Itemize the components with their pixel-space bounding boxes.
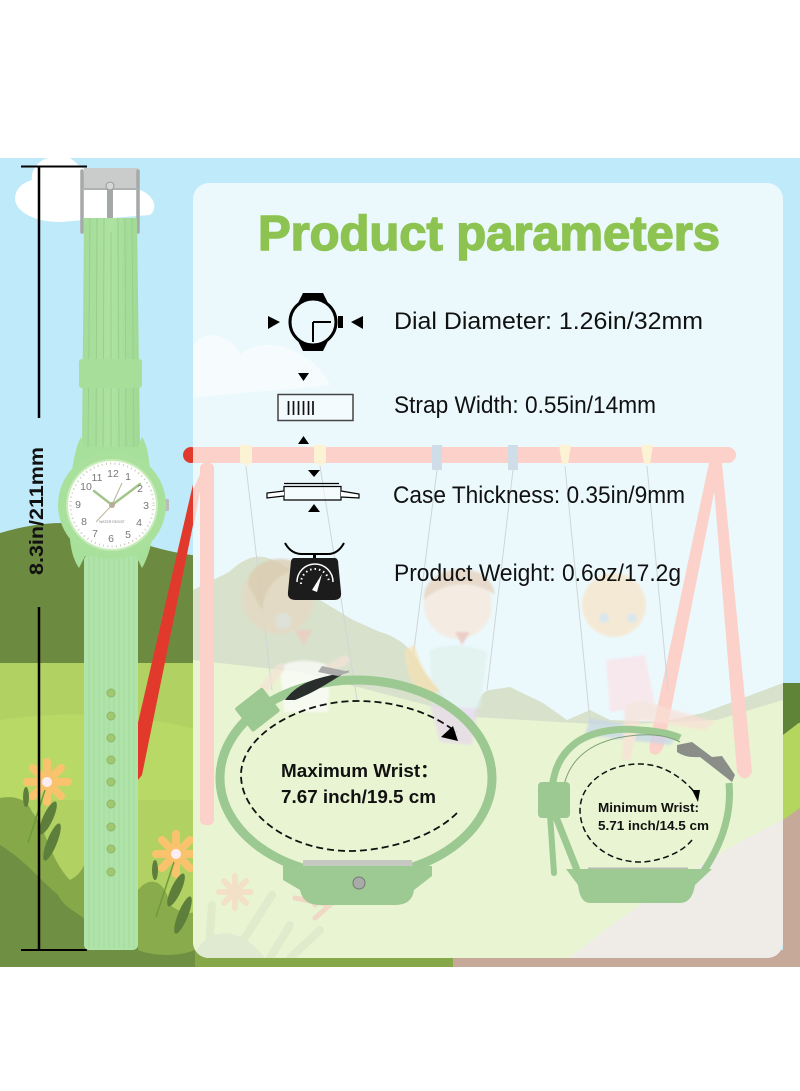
swing frame: red outer parts (138, 447, 193, 780)
flower: left (23, 762, 68, 862)
watch case: 5 (125, 529, 131, 541)
lower strap (84, 555, 138, 950)
watch case: 11 (92, 472, 103, 484)
title: Product parameters (258, 207, 720, 261)
label: maximum size: 7.67 inch/19.5 cm (281, 787, 436, 807)
watch case: 3 (143, 500, 149, 512)
label: minimum wrist: Minimum Wrist: (598, 801, 699, 815)
cloud: faded in panel (193, 335, 330, 398)
hills: faded (193, 556, 783, 725)
dashed arrow (241, 701, 457, 851)
watch case: 6 (108, 533, 114, 545)
cloud: top left (15, 158, 154, 222)
icon: dial diameter (268, 293, 363, 351)
watch case: 1 (125, 471, 131, 483)
strap holes (107, 689, 115, 876)
watch: maximum wrist (220, 666, 492, 905)
case (566, 869, 712, 903)
path (570, 820, 783, 958)
watch case: WATER RESIST (99, 520, 126, 524)
watch case: 12 (107, 468, 119, 480)
spec: case thickness: Case Thickness: 0.35in/9mm (393, 482, 685, 509)
keeper (234, 687, 280, 732)
ground (193, 660, 783, 958)
buckle (82, 168, 139, 232)
band (552, 729, 680, 870)
flowers: faded (208, 876, 330, 958)
watch case (58, 437, 169, 568)
swing frame (185, 447, 752, 825)
length measure (21, 166, 87, 950)
panel: product parameters (185, 183, 783, 958)
spec: strap width: Strap Width: 0.55in/14mm (394, 392, 656, 419)
case (283, 860, 432, 905)
length label: 8.3in/211mm (26, 447, 48, 575)
label: maximum wrist: Maximum Wrist： (281, 761, 439, 781)
bushes: faded bottom (193, 933, 265, 958)
keeper (538, 782, 570, 818)
watch case: 9 (75, 499, 81, 511)
watch: full strap view (58, 168, 169, 950)
kid: left (242, 559, 345, 712)
watch case: 2 (137, 483, 143, 495)
kid: middle (405, 569, 495, 745)
watch case: 4 (136, 517, 142, 529)
strap keeper (79, 359, 142, 388)
clasp (285, 670, 350, 700)
dashed arrow (580, 764, 697, 862)
band (220, 680, 492, 876)
clasp (677, 742, 735, 782)
bushes: bottom left (0, 797, 195, 967)
spec: product weight: Product Weight: 0.6oz/17.2g (394, 560, 681, 587)
watch: minimum wrist (538, 729, 735, 903)
icon: strap width (278, 373, 353, 444)
watch case: 10 (80, 481, 92, 493)
upper strap (82, 218, 140, 450)
watch case: 8 (81, 516, 87, 528)
label: minimum size: 5.71 inch/14.5 cm (598, 819, 709, 833)
icon: product weight (285, 543, 344, 600)
kid: right (582, 573, 715, 760)
watch case: 7 (92, 528, 98, 540)
background scene (0, 158, 800, 967)
swing clips (240, 445, 653, 470)
swing ropes (246, 466, 668, 722)
flower: right (152, 834, 195, 935)
spec: dial diameter: Dial Diameter: 1.26in/32mm (394, 308, 703, 335)
icon: case thickness (267, 470, 359, 512)
